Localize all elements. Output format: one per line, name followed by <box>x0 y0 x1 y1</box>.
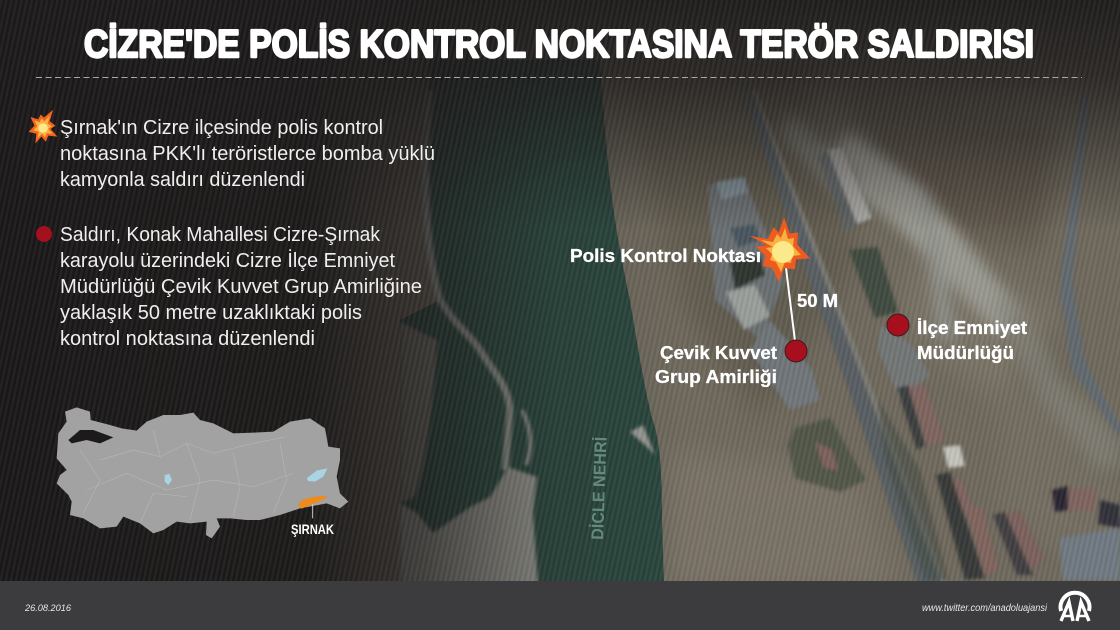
label: Çevik Kuvvet Grup Amirliği: Grup Amirliği <box>655 367 777 387</box>
icon: explosion marker <box>750 217 810 282</box>
text block: second bullet <box>60 224 422 350</box>
text block: first bullet <box>60 117 435 191</box>
river label: DİCLE NEHRİ <box>588 437 611 540</box>
text block: second bullet: Saldırı, Konak Mahallesi Cizre-Şırnak <box>60 224 381 246</box>
marker: Çevik Kuvvet <box>785 340 807 362</box>
river <box>400 60 664 585</box>
text block: second bullet: karayolu üzerindeki Cizre İlçe Emniyet <box>60 249 395 272</box>
text block: first bullet: Şırnak'ın Cizre ilçesinde polis kontrol <box>60 117 383 139</box>
label: İlçe Emniyet Müdürlüğü: İlçe Emniyet <box>917 318 1027 338</box>
label: 50 M: 50 M <box>797 291 838 311</box>
distance line <box>786 268 795 341</box>
lake: Tuz <box>165 474 172 485</box>
label: İlçe Emniyet Müdürlüğü <box>917 318 1027 363</box>
label: İlçe Emniyet Müdürlüğü: Müdürlüğü <box>917 343 1014 363</box>
region: Şırnak <box>298 496 328 509</box>
lake: Van <box>307 468 327 482</box>
icon: explosion bullet <box>29 110 57 143</box>
twitter address: www.twitter.com/anadoluajansi <box>922 602 1048 614</box>
river banks and sandbar <box>400 90 655 585</box>
label: Çevik Kuvvet Grup Amirliği: Çevik Kuvvet <box>660 343 777 363</box>
label: Polis Kontrol Noktası: Polis Kontrol Noktası <box>570 246 761 266</box>
date: 26.08.2016 <box>24 603 72 614</box>
compounds and rooftops <box>708 148 1120 580</box>
highway <box>742 90 1120 585</box>
text block: first bullet: noktasına PKK'lı teröristlerce bomba yüklü <box>60 143 435 165</box>
text block: second bullet: kontrol noktasına düzenlendi <box>60 328 315 350</box>
footer bar <box>0 581 1120 630</box>
map label: Şırnak: ŞIRNAK <box>291 521 334 537</box>
label: Çevik Kuvvet Grup Amirliği <box>655 343 777 387</box>
marker: İlçe Emniyet <box>887 314 909 336</box>
icon: red dot bullet <box>36 226 52 242</box>
dark fade overlays <box>0 0 680 585</box>
map: Turkey <box>57 407 348 538</box>
text block: second bullet: Müdürlüğü Çevik Kuvvet Grup Amirliğine <box>60 276 422 298</box>
icon: Anadolu Agency logo <box>1060 593 1090 621</box>
text block: second bullet: yaklaşık 50 metre uzaklıktaki polis <box>60 302 362 324</box>
text block: first bullet: kamyonla saldırı düzenlendi <box>60 169 305 191</box>
